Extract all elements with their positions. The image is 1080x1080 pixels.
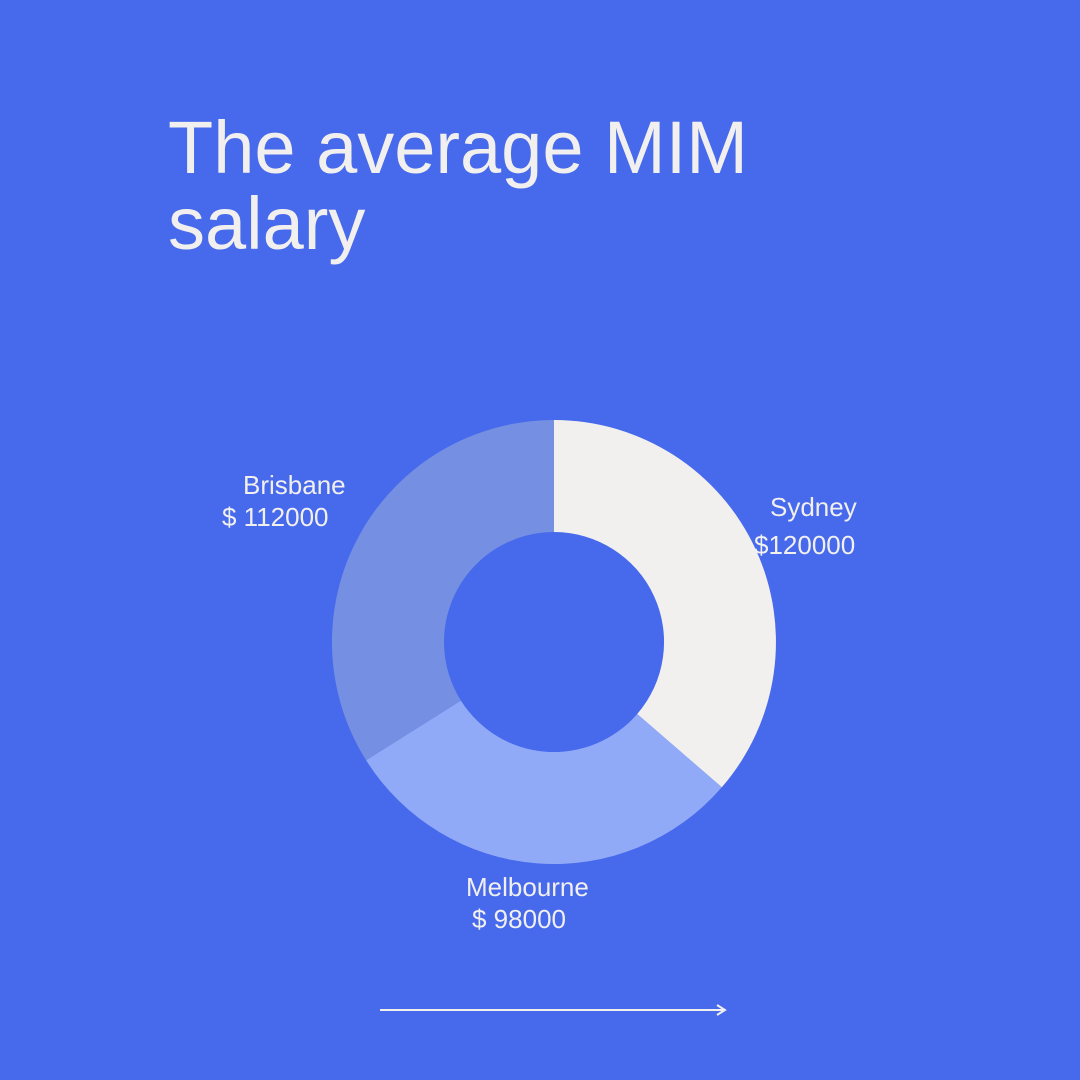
slice: Melbourne: [366, 701, 722, 864]
slice: Sydney: [554, 420, 776, 787]
title: The average MIM: [168, 106, 748, 189]
slice: Brisbane: [332, 420, 554, 760]
label: Sydney: [754, 492, 857, 560]
label: Sydney: $120000: [754, 530, 855, 560]
label: Melbourne: $ 98000: [472, 904, 566, 934]
arrow: [380, 1004, 727, 1016]
label: Brisbane: Brisbane: [243, 470, 346, 500]
title: salary: [168, 182, 365, 265]
label: Brisbane: $ 112000: [222, 502, 329, 532]
label: Brisbane: [222, 470, 346, 532]
label: Melbourne: Melbourne: [466, 872, 589, 902]
label: Sydney: Sydney: [770, 492, 857, 522]
label: Melbourne: [466, 872, 589, 934]
title: [168, 106, 748, 265]
